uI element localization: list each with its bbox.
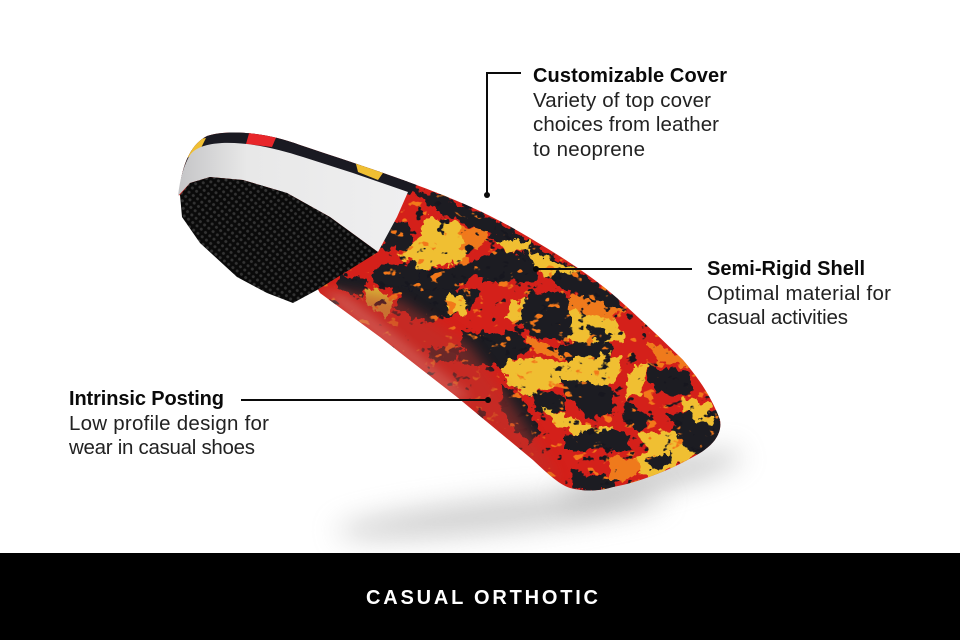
- description: choices from leather: [533, 113, 719, 136]
- black textured heel pad: [180, 177, 378, 303]
- description: Variety of top cover: [533, 89, 711, 112]
- strip colour accents: [184, 138, 385, 180]
- fine orange flecks: [184, 137, 719, 490]
- description: casual activities: [707, 306, 848, 329]
- description: wear in casual shoes: [68, 436, 255, 459]
- fine dark flecks: [190, 132, 718, 484]
- heading: Customizable Cover: [533, 65, 727, 87]
- callout: semi-rigid shell: [533, 258, 891, 329]
- insole illustration: [178, 132, 720, 490]
- description: Low profile design for: [69, 412, 269, 435]
- top edge strip: [180, 132, 417, 195]
- heading: Semi-Rigid Shell: [707, 258, 865, 280]
- shadow under insole: [334, 444, 745, 547]
- camouflage shell: [179, 132, 720, 490]
- heading: Intrinsic Posting: [69, 388, 224, 410]
- white heel band: [178, 143, 408, 252]
- description: Optimal material for: [707, 282, 891, 305]
- leader line: [241, 399, 488, 401]
- footer bar: [0, 553, 960, 640]
- description: to neoprene: [533, 138, 645, 161]
- leader line: [536, 268, 692, 270]
- muted red lower-left tint: [310, 285, 560, 480]
- callout: customizable cover: [484, 65, 727, 198]
- callout: intrinsic posting: [68, 388, 491, 459]
- leader line: [487, 73, 521, 195]
- footer title: CASUAL ORTHOTIC: [366, 587, 598, 609]
